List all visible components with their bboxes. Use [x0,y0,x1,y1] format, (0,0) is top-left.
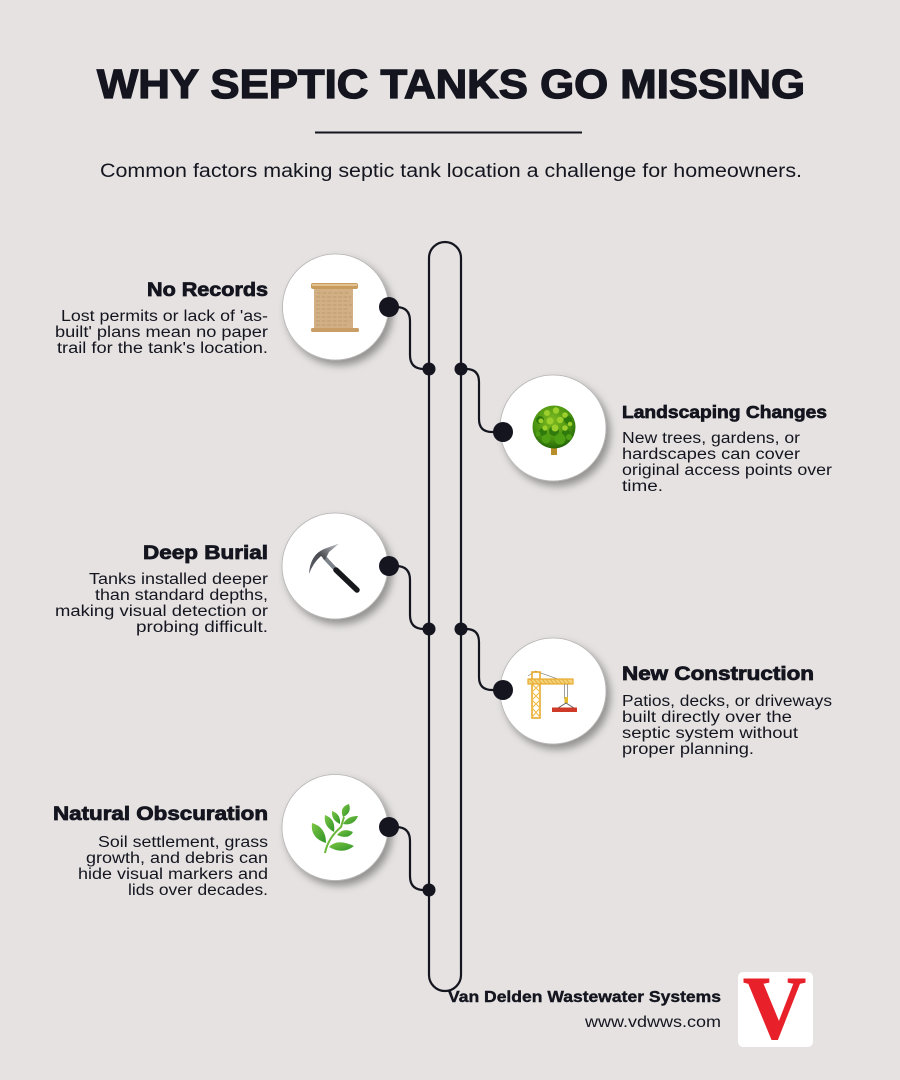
text: deep burial: Tanks installed deeper [89,571,268,588]
node: new construction [493,680,513,700]
text: deep burial: probing difficult. [136,619,268,636]
text: landscaping changes: hardscapes can cover [622,446,800,463]
icon: tree [532,406,576,455]
footer website: www.vdwws.com [584,1014,721,1031]
central timeline track [429,242,461,991]
text: natural obscuration: Natural Obscuration [53,803,268,825]
junction: new construction [454,622,468,636]
text: natural obscuration [53,803,268,899]
connector: landscaping changes [461,369,503,432]
text: no records: No Records [147,279,268,301]
connector: deep burial [389,566,429,629]
text: landscaping changes: New trees, gardens, or [622,430,800,447]
logo: V [743,959,806,1058]
text: new construction: septic system without [622,725,799,742]
icon: pickaxe [309,544,357,590]
text: new construction: New Construction [622,663,814,685]
text: deep burial: than standard depths, [95,587,268,604]
junction: landscaping changes [454,362,468,376]
text: new construction [622,663,832,758]
icon circle: no records [282,254,388,360]
text: landscaping changes: time. [622,478,663,495]
text: deep burial: making visual detection or [55,603,268,620]
subtitle: Common factors making septic tank location a challenge for homeowners. [100,161,802,182]
text: no records [55,279,268,357]
icon: leaf sprig [312,804,358,853]
junction: no records [422,362,436,376]
text: landscaping changes: Landscaping Changes [622,402,827,422]
text: natural obscuration: hide visual markers and [78,866,268,883]
text: no records: built' plans mean no paper [55,324,268,341]
footer company name: Van Delden Wastewater Systems [448,989,721,1006]
panel: natural obscuration [53,774,436,899]
text: natural obscuration: Soil settlement, grass [98,834,268,851]
icon circle: natural obscuration [282,774,388,880]
panel: new construction [454,622,832,758]
panel: no records [55,254,436,376]
icon: scroll [311,283,359,332]
connector: natural obscuration [389,827,429,890]
icon circle: new construction [500,638,606,744]
text: deep burial: Deep Burial [143,542,268,564]
text: natural obscuration: lids over decades. [128,882,268,899]
node: natural obscuration [379,817,399,837]
panel: landscaping changes [454,362,832,495]
text: new construction: proper planning. [622,741,754,758]
node: landscaping changes [493,422,513,442]
icon circle: landscaping changes [500,375,606,481]
title: WHY SEPTIC TANKS GO MISSING [97,61,805,107]
node: no records [379,297,399,317]
text: landscaping changes: original access points over [622,462,832,479]
text: landscaping changes [622,402,832,495]
junction: deep burial [422,622,436,636]
icon: crane [528,671,577,718]
text: deep burial [55,542,268,636]
text: natural obscuration: growth, and debris can [86,850,268,867]
text: new construction: built directly over the [622,709,792,726]
text: no records: trail for the tank's location. [57,340,268,357]
connector: new construction [461,629,503,690]
text: no records: Lost permits or lack of 'as- [61,308,268,325]
connector: no records [389,307,429,369]
junction: natural obscuration [422,884,436,896]
node: deep burial [379,556,399,576]
icon circle: deep burial [282,513,388,619]
panel: deep burial [55,513,436,636]
text: new construction: Patios, decks, or driveways [622,693,832,710]
